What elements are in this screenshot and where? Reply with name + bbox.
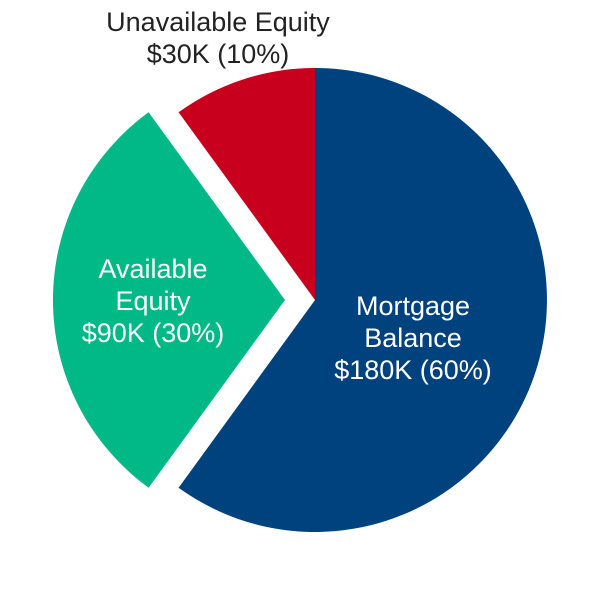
label: available equity: $90K (30%) <box>82 318 224 348</box>
slice: unavailable equity <box>179 68 315 300</box>
label: unavailable equity: Unavailable Equity <box>106 7 330 37</box>
label: mortgage balance: Mortgage <box>356 291 470 321</box>
slice: available equity <box>53 112 285 488</box>
label: available equity: Equity <box>115 286 191 316</box>
label: mortgage balance: Balance <box>364 323 462 353</box>
label: mortgage balance: $180K (60%) <box>334 355 492 385</box>
label: available equity: Available <box>98 254 208 284</box>
slice: mortgage balance <box>179 68 547 532</box>
label: unavailable equity: $30K (10%) <box>147 39 289 69</box>
